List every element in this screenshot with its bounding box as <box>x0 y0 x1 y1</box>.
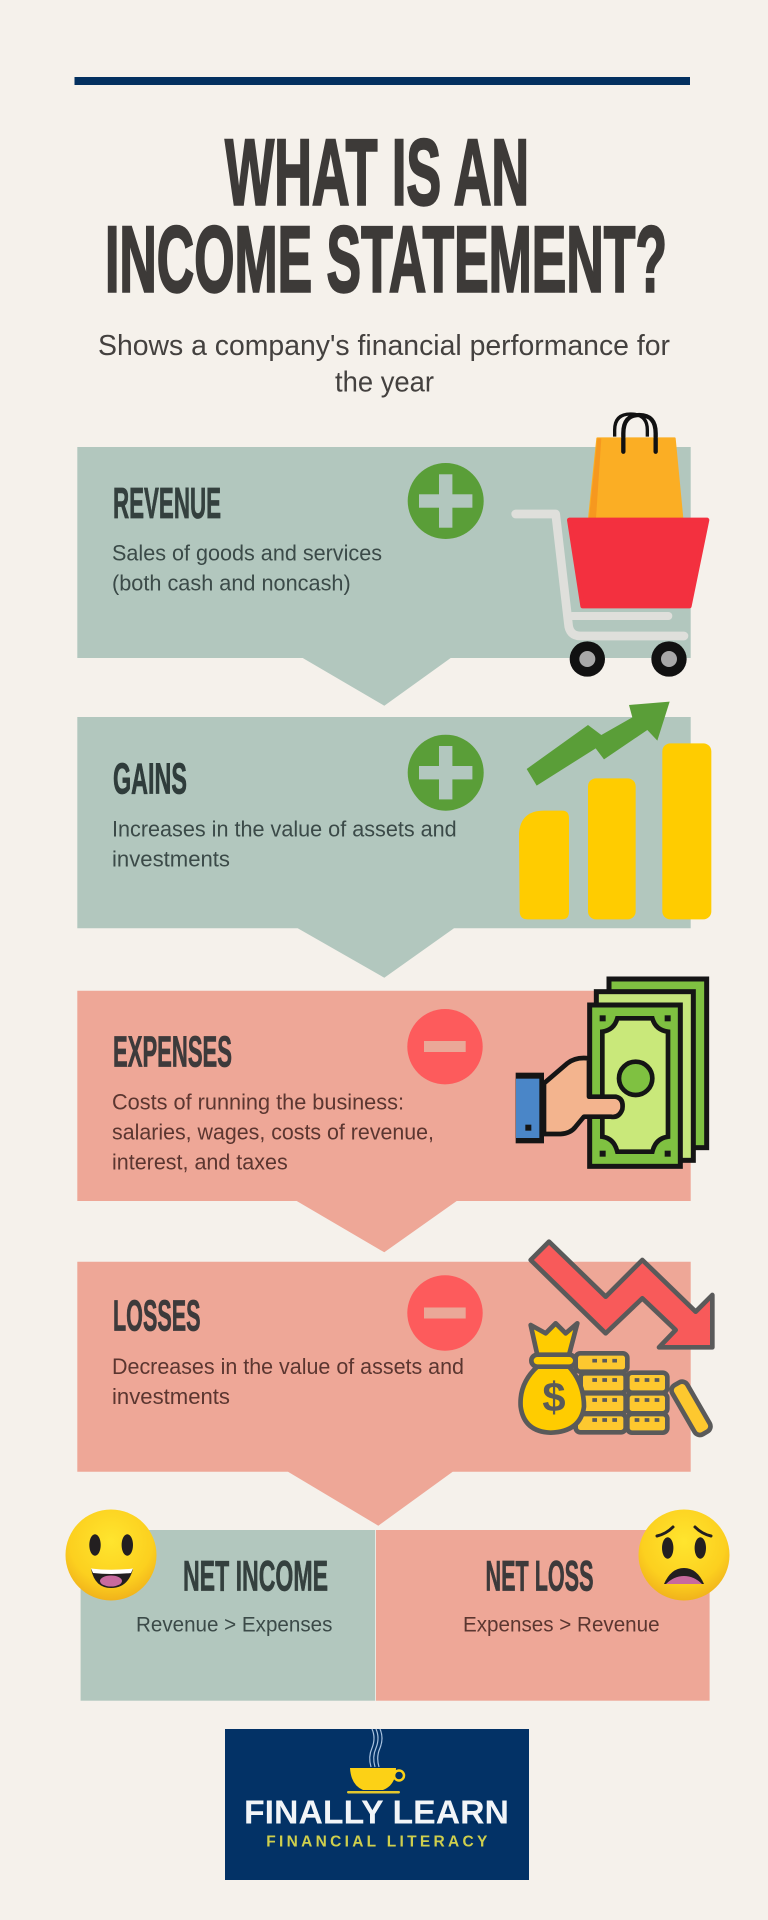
description: expenses: salaries, wages, costs of revenue, <box>112 1119 434 1144</box>
icon: plus <box>408 463 484 539</box>
description: revenue: (both cash and noncash) <box>112 571 351 596</box>
icon: hand holding money <box>516 979 707 1166</box>
formula: net income: Revenue > Expenses <box>136 1613 332 1637</box>
title <box>105 119 667 312</box>
description: expenses: Costs of running the business: <box>112 1089 404 1114</box>
description: losses: investments <box>112 1384 230 1409</box>
icon: growth bars and arrow <box>519 702 711 919</box>
icon: falling arrow and money bag: $ <box>542 1374 566 1421</box>
description: gains: investments <box>112 847 230 872</box>
description: expenses: interest, and taxes <box>112 1149 288 1174</box>
description: expenses <box>112 1089 434 1174</box>
description: losses: Decreases in the value of assets and <box>112 1354 464 1379</box>
icon: cup <box>347 1768 404 1794</box>
panel: losses <box>77 1262 691 1526</box>
description: gains: Increases in the value of assets and <box>112 817 457 842</box>
subtitle: the year <box>335 367 434 399</box>
icon: steam <box>370 1729 382 1767</box>
heading: net income: NET INCOME <box>183 1552 328 1600</box>
top rule <box>74 77 690 85</box>
heading: gains: GAINS <box>113 755 187 804</box>
panel: net loss <box>376 1530 710 1701</box>
panel: expenses <box>77 991 691 1252</box>
heading: revenue: REVENUE <box>113 479 221 528</box>
wordmark: FINALLY LEARN <box>244 1793 509 1830</box>
panel: net income <box>81 1530 375 1701</box>
icon: plus <box>408 735 484 811</box>
description: gains <box>112 817 457 872</box>
icon: shopping cart with bag <box>516 414 707 677</box>
icon: happy face <box>66 1510 156 1600</box>
panel: revenue <box>77 447 691 706</box>
formula: net loss: Expenses > Revenue <box>463 1613 660 1637</box>
icon: falling arrow and money bag <box>521 1242 713 1437</box>
subtitle: Shows a company's financial performance for <box>98 330 670 362</box>
description: revenue: Sales of goods and services <box>112 541 382 566</box>
description: revenue <box>112 541 382 596</box>
heading: expenses: EXPENSES <box>113 1027 232 1076</box>
subtitle <box>98 330 670 399</box>
icon: worried face <box>638 1510 730 1600</box>
tagline: FINANCIAL LITERACY <box>266 1834 488 1851</box>
panel: gains <box>77 717 691 978</box>
icon: minus <box>407 1009 483 1084</box>
logo <box>225 1729 529 1880</box>
title: WHAT IS AN <box>225 119 529 224</box>
description: losses <box>112 1354 464 1409</box>
heading: net loss: NET LOSS <box>486 1552 594 1600</box>
panel: losses: LOSSES <box>113 1292 200 1341</box>
icon: minus <box>407 1275 483 1351</box>
